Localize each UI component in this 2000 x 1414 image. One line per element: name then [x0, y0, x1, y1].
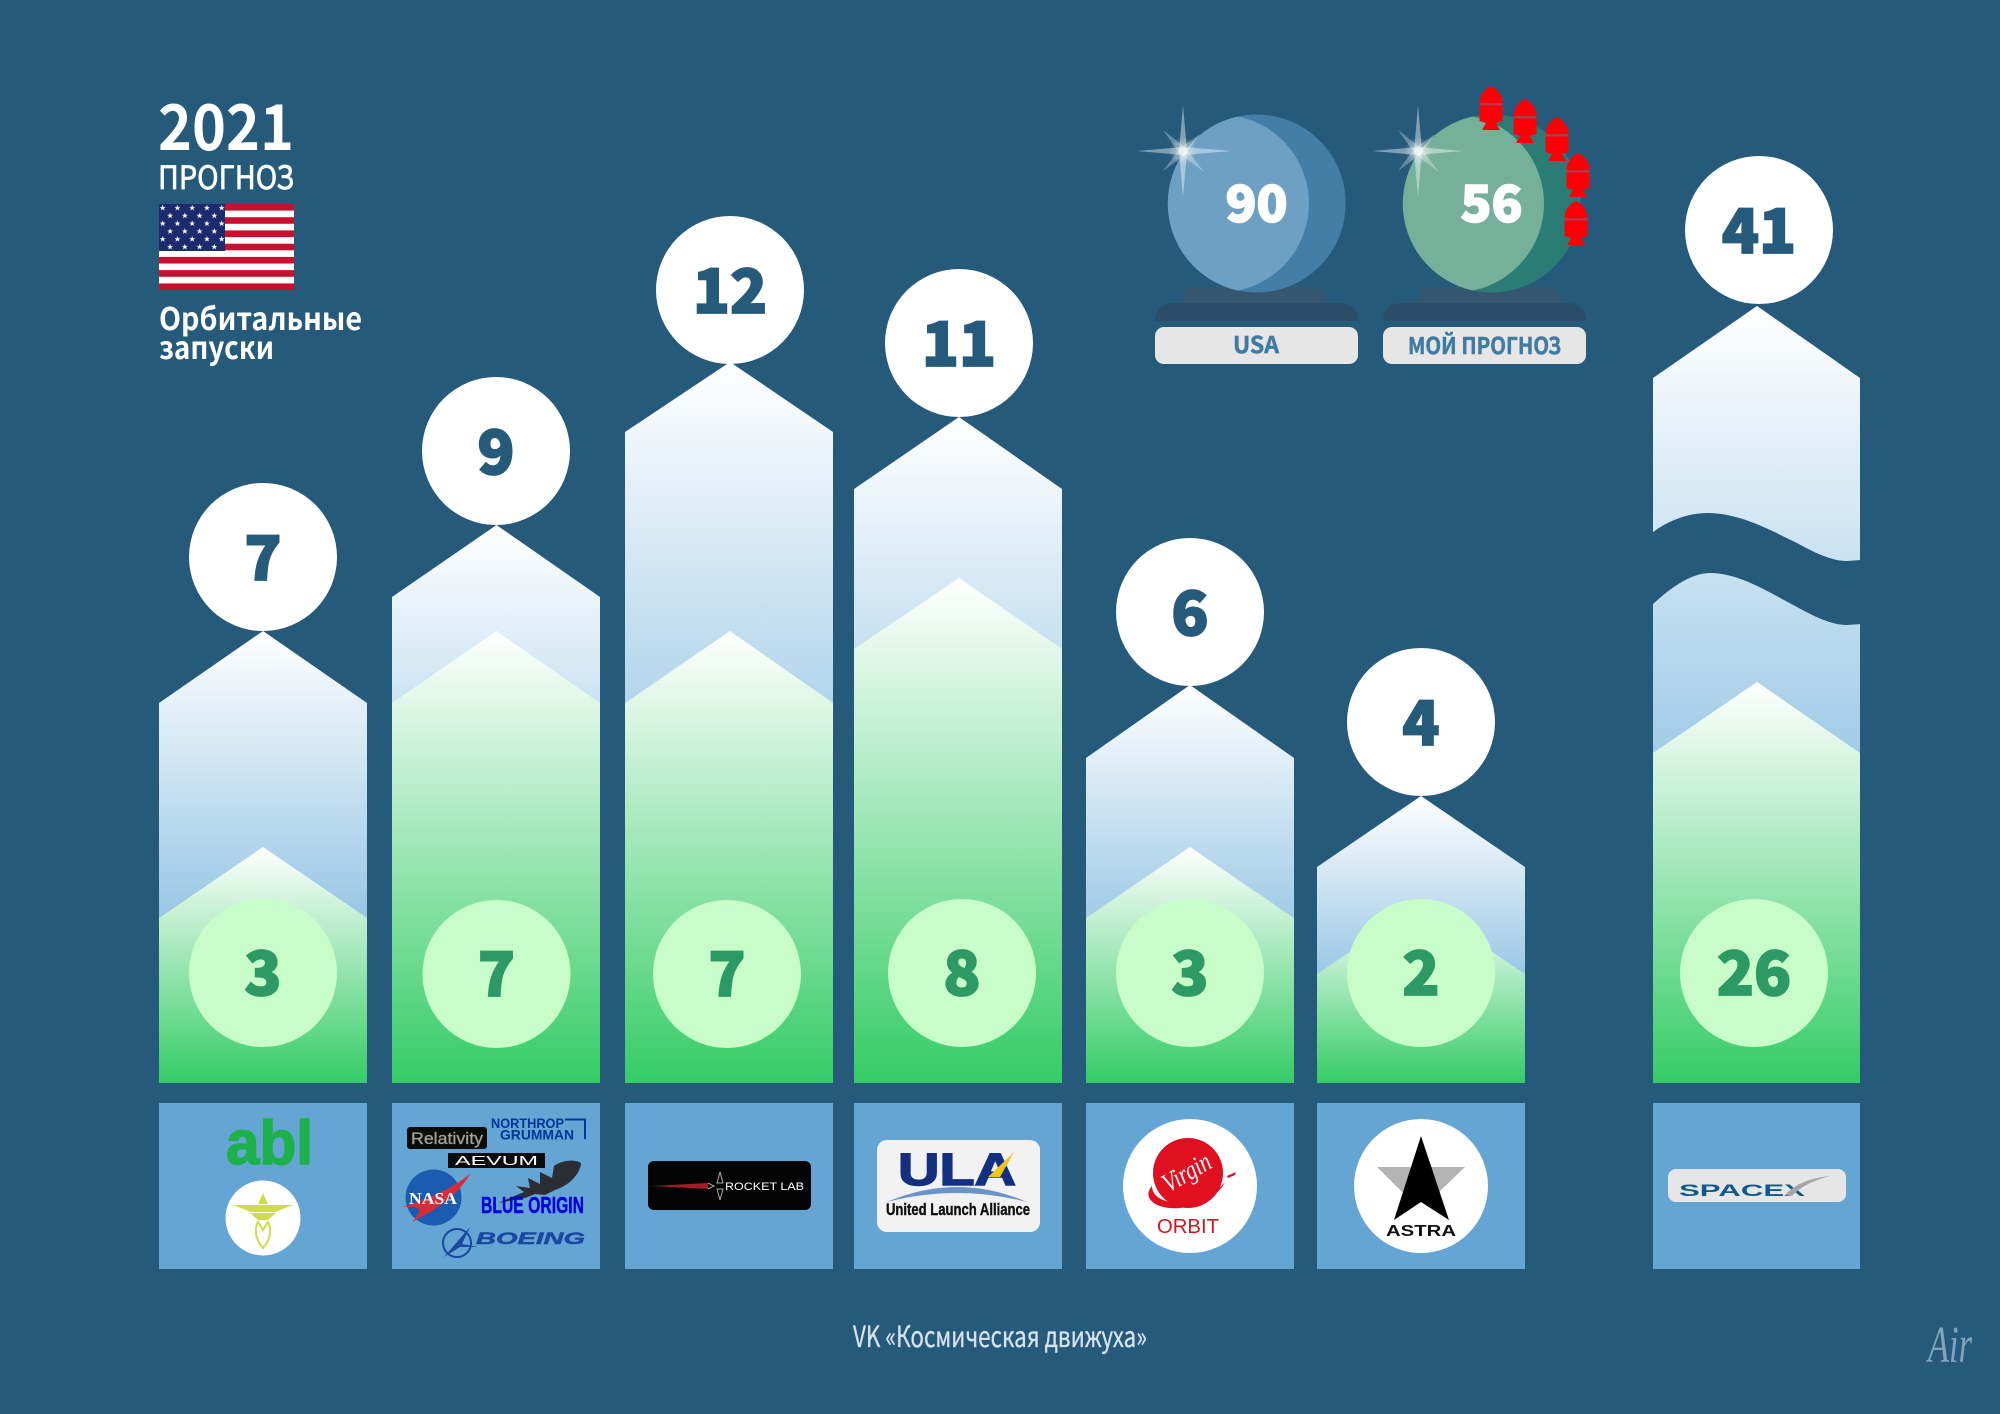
logo panel: SpaceX	[1653, 1103, 1860, 1269]
column: mid-size providers	[392, 377, 600, 1269]
badge: actual 3: 3	[1171, 924, 1209, 1013]
badge: actual 7: 7	[708, 925, 746, 1014]
icon: US flag	[159, 204, 294, 290]
logo panel: Virgin Orbit: ORBIT	[1157, 1216, 1219, 1238]
column: ABL and Firefly	[159, 483, 367, 1269]
axis break wave	[1652, 513, 1861, 625]
badge: actual 3	[189, 899, 337, 1047]
badge: actual 7	[422, 900, 570, 1048]
badge: forecast 11: 11	[922, 295, 996, 384]
crystal ball: USA	[1137, 105, 1358, 364]
column: ULA	[854, 269, 1062, 1269]
badge: forecast 41: 41	[1722, 182, 1796, 271]
signature: Air	[1926, 1317, 1973, 1374]
logo panel: Relativity, Northrop Grumman, Aevum, NASA, Blue Origin, Boeing: BLUE ORIGIN	[481, 1192, 584, 1218]
column: Rocket Lab	[625, 216, 833, 1269]
logo panel: Relativity, Northrop Grumman, Aevum, NASA, Blue Origin, Boeing: Relativity	[411, 1129, 484, 1148]
badge: forecast 9	[422, 377, 570, 525]
badge: forecast 12	[656, 216, 804, 364]
icon: sparkle	[1137, 105, 1232, 197]
logo panel: Relativity, Northrop Grumman, Aevum, NASA, Blue Origin, Boeing: GRUMMAN	[500, 1126, 574, 1142]
logo panel: Relativity, Northrop Grumman, Aevum, NASA, Blue Origin, Boeing: BOEING	[476, 1229, 585, 1248]
logo panel: Relativity, Northrop Grumman, Aevum, NASA, Blue Origin, Boeing: NORTHROP	[491, 1115, 564, 1131]
logo panel: ABL, Firefly: abl	[226, 1109, 313, 1178]
label: USA	[1155, 326, 1358, 364]
badge: actual 7: 7	[478, 925, 515, 1014]
badge: actual 7	[653, 900, 801, 1048]
badge: actual 3: 3	[244, 924, 282, 1013]
badge: actual 26	[1680, 899, 1828, 1047]
badge: actual 26: 26	[1717, 924, 1791, 1013]
crystal ball: my forecast	[1372, 86, 1590, 364]
number: 90: 90	[1225, 163, 1288, 237]
badge: forecast 11	[885, 269, 1033, 417]
badge: forecast 4	[1347, 648, 1495, 796]
icons: red rockets	[1480, 86, 1590, 245]
badge: actual 2: 2	[1402, 924, 1440, 1013]
logo panel: Virgin Orbit: Virgin	[1156, 1146, 1217, 1198]
subheading: forecast: ПРОГНОЗ	[158, 153, 294, 199]
badge: forecast 7: 7	[244, 509, 282, 598]
column: SpaceX	[1652, 156, 1861, 1269]
logo panel: Virgin Orbit	[1086, 1103, 1294, 1269]
logo panel: ULA: United Launch Alliance	[886, 1200, 1030, 1219]
badge: actual 8: 8	[943, 924, 981, 1013]
footer credit: VK «Космическая движуха»	[853, 1314, 1147, 1356]
logo panel: Astra: ASTRA	[1386, 1223, 1457, 1240]
badge: forecast 4: 4	[1402, 674, 1440, 763]
badge: actual 2	[1347, 899, 1495, 1047]
logo panel: Rocket Lab	[625, 1103, 833, 1269]
text: orbital launches: запуски	[159, 323, 274, 368]
text: orbital launches: Орбитальные	[159, 294, 362, 339]
title block	[158, 78, 362, 368]
logo panel: ULA	[854, 1103, 1062, 1269]
badge: actual 3	[1116, 899, 1264, 1047]
badge: forecast 12: 12	[693, 242, 767, 331]
logo panel: Rocket Lab: ROCKET LAB	[725, 1181, 804, 1193]
badge: actual 8	[888, 899, 1036, 1047]
column: Astra	[1317, 648, 1525, 1269]
logo panel: Relativity, Northrop Grumman, Aevum, NASA, Blue Origin, Boeing: AEVUM	[455, 1153, 538, 1168]
badge: forecast 41	[1685, 156, 1833, 304]
column: Virgin Orbit	[1086, 538, 1294, 1269]
icon: sparkle	[1372, 105, 1463, 197]
logo panel: Relativity, Northrop Grumman, Aevum, NASA, Blue Origin, Boeing	[392, 1103, 600, 1269]
text: orbital launches	[159, 294, 362, 368]
logo panel: ABL, Firefly	[159, 1103, 367, 1269]
logo panel: SpaceX: SPACEX	[1679, 1181, 1806, 1200]
badge: forecast 6: 6	[1171, 564, 1209, 653]
heading: year: 2021	[158, 78, 294, 169]
logo panel: Astra	[1317, 1103, 1525, 1269]
logo panel: Relativity, Northrop Grumman, Aevum, NASA, Blue Origin, Boeing: NASA	[409, 1189, 458, 1208]
logo panel: ULA: ULA	[898, 1144, 1016, 1195]
badge: forecast 6	[1116, 538, 1264, 686]
label: my forecast: МОЙ ПРОГНОЗ	[1408, 327, 1561, 361]
label: USA: USA	[1233, 326, 1279, 360]
number: 56: 56	[1460, 163, 1523, 237]
badge: forecast 7	[189, 483, 337, 631]
badge: forecast 9: 9	[477, 403, 515, 492]
